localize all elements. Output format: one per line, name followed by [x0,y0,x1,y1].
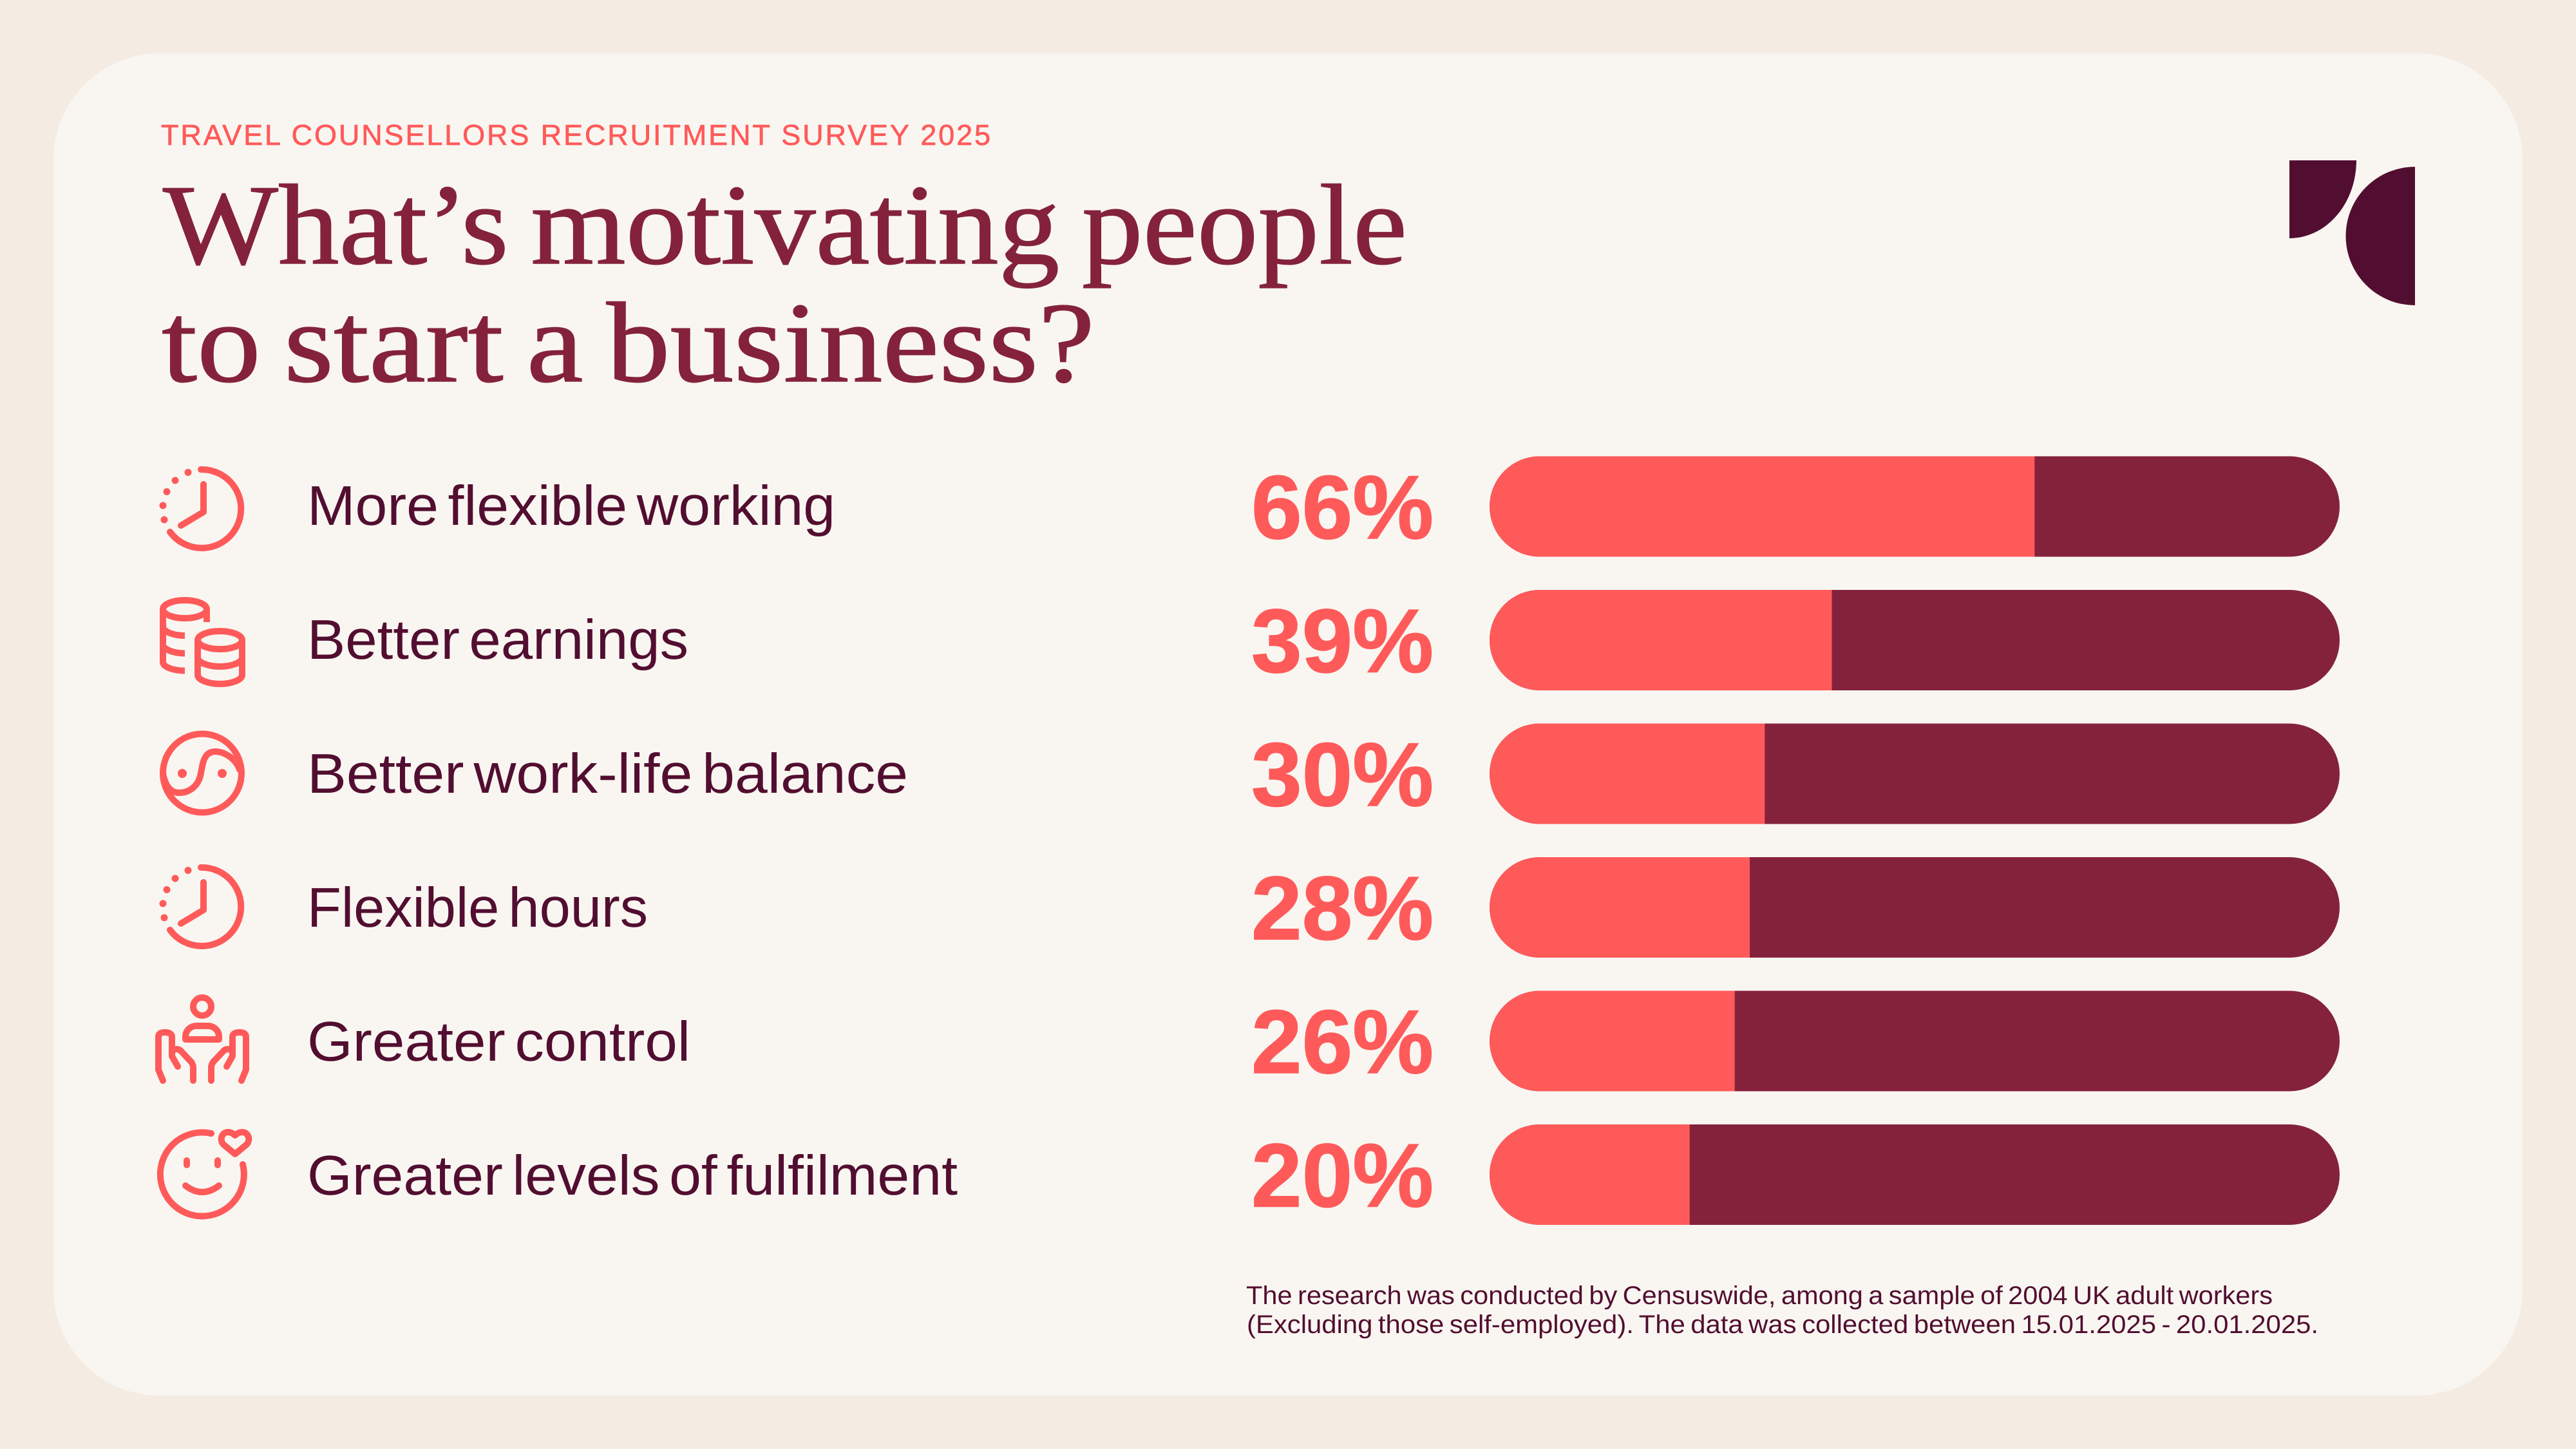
label: Greater control [307,1010,690,1073]
label: Flexible hours [307,876,648,939]
title [162,161,1407,406]
row: better work-life balance [163,724,2340,825]
icon: coins [163,600,242,684]
footnote: (Excluding those self-employed). The data was collected between 15.01.2025 - 20.01.2025. [1247,1311,2318,1339]
percentage: 26% [1251,991,1434,1092]
eyebrow: TRAVEL COUNSELLORS RECRUITMENT SURVEY 2025 [161,118,990,151]
icon: clock [160,469,241,548]
percentage: 66% [1251,457,1434,558]
icon: person with hands [158,998,246,1081]
row: more flexible working [160,456,2340,558]
row: better earnings [163,590,2340,692]
label: Greater levels of fulfilment [307,1144,958,1207]
title: to start a business? [162,279,1095,406]
bar [1490,456,2340,556]
bar [1490,857,2340,958]
footnote [1246,1282,2318,1339]
label: Better work-life balance [307,743,908,805]
icon: balance [163,734,242,813]
percentage: 20% [1251,1124,1434,1226]
bar [1490,724,2340,824]
percentage: 39% [1251,590,1434,692]
footnote: The research was conducted by Censuswide, among a sample of 2004 UK adult workers [1246,1282,2273,1310]
icon: logo [2289,160,2415,305]
row: greater control [158,990,2340,1092]
bar [1490,590,2340,690]
icon: smiley with heart [160,1132,249,1216]
title: What’s motivating people [163,161,1407,289]
label: Better earnings [307,609,688,671]
bar [1490,1124,2340,1225]
icon: clock [160,867,241,946]
percentage: 30% [1251,724,1434,825]
percentage: 28% [1251,858,1434,958]
row: greater levels of fulfilment [160,1124,2340,1226]
label: More flexible working [307,475,835,537]
row: flexible hours [160,857,2340,958]
bar [1490,990,2340,1091]
